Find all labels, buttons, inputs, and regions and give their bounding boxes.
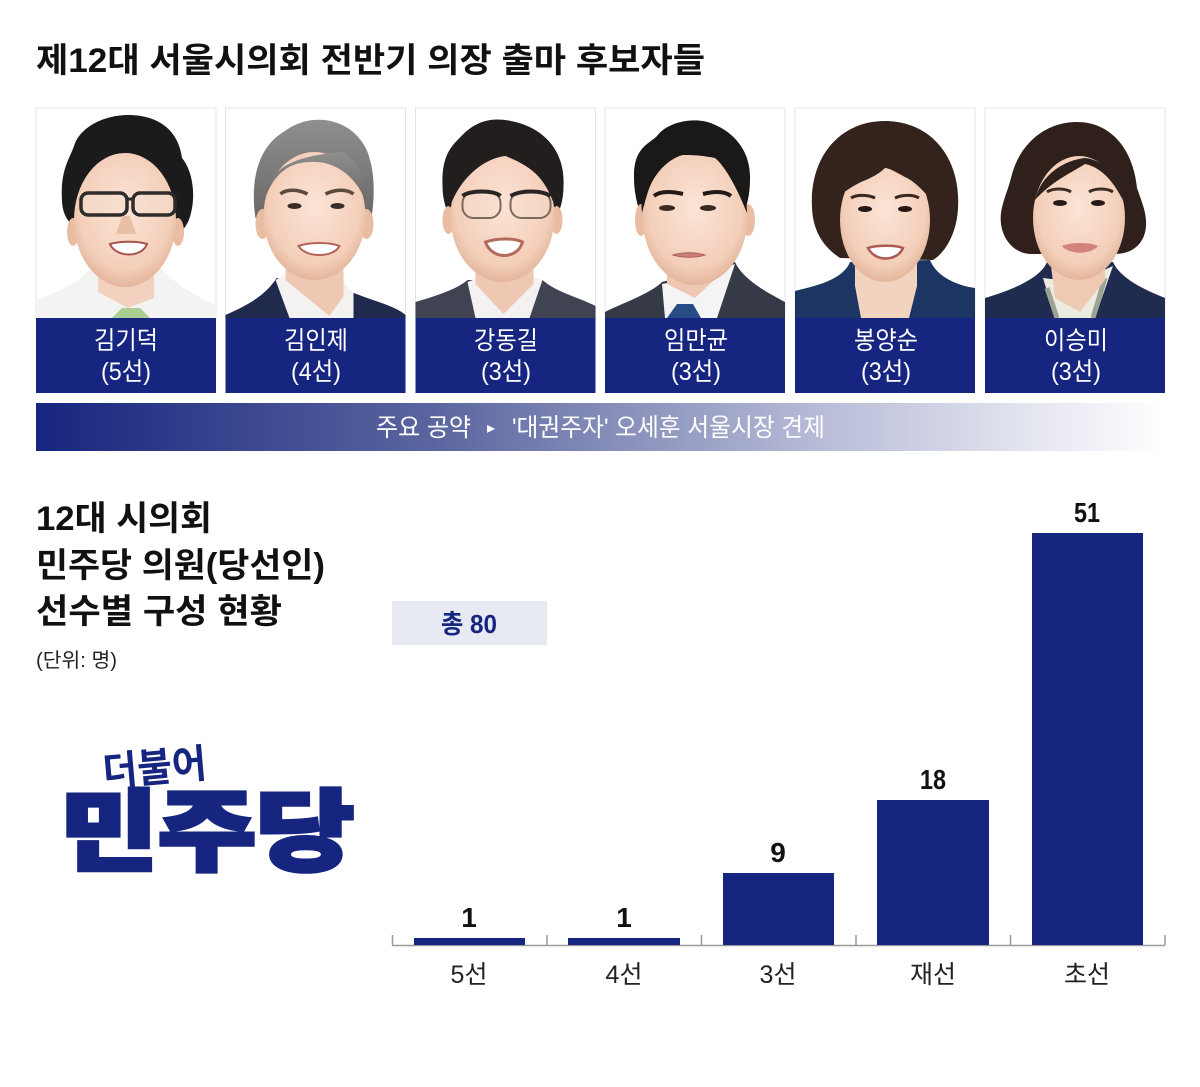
banner: main pledge [36,403,1165,451]
logo: 더불어민주당: 민주당 [60,783,354,882]
candidate card: 강동길: (3선) [481,358,531,386]
candidate card: 김기덕: (5선) [101,358,151,386]
candidate card: 이승미 [985,108,1165,393]
candidate card: 강동길 [416,108,596,393]
bar: 4선: 4선 [606,961,642,989]
bar: 재선: 재선 [910,961,956,989]
candidate card: 이승미: 이승미 [1044,327,1108,355]
portrait: 임만균 [605,120,785,318]
candidate card: 봉양순: 봉양순 [854,327,918,355]
portrait: 김인제 [226,120,406,318]
banner: main pledge: ▸ [487,420,495,437]
candidate card: 임만균 [605,108,785,393]
bar: 5선: 5선 [451,961,487,989]
candidate card: 김기덕: 김기덕 [94,327,158,355]
bar: 4선 [568,902,680,989]
bar: 초선: 초선 [1064,961,1110,989]
banner: main pledge: 주요 공약 [376,414,471,442]
candidate card: 봉양순 [795,108,975,393]
candidate card: 김인제: (4선) [291,358,341,386]
portrait: 봉양순 [795,121,975,318]
chart heading: 12대 시의회 [36,500,212,538]
bar: 5선: 1 [461,902,477,933]
logo: 더불어민주당 [60,742,354,882]
bar: 4선: 1 [616,902,632,933]
logo: 더불어민주당: 더불어 [101,742,208,795]
candidate card: 김인제 [226,108,406,393]
panel: candidates [36,108,1165,393]
bar: 3선 [723,837,834,989]
candidate card: 김기덕 [36,108,216,393]
candidate card: 김인제: 김인제 [284,327,348,355]
bar chart [392,497,1165,989]
portrait: 강동길 [416,119,596,318]
banner: main pledge: '대권주자' 오세훈 서울시장 견제 [512,414,825,442]
portrait: 이승미 [985,122,1165,318]
bar: 3선: 9 [770,837,786,868]
candidate card: 임만균: (3선) [671,358,721,386]
title: 제12대 서울시의회 전반기 의장 출마 후보자들 [36,42,705,80]
chart heading [36,500,325,631]
bar: 3선: 3선 [760,961,796,989]
total callout: 총 80 [441,609,497,639]
candidate card: 강동길: 강동길 [474,327,538,355]
unit note: (단위: 명) [36,649,117,672]
bar: 초선 [1032,497,1143,989]
chart heading: 민주당 의원(당선인) [36,547,325,585]
candidate card: 이승미: (3선) [1051,358,1101,386]
bar: 5선 [414,902,525,989]
candidate card: 봉양순: (3선) [861,358,911,386]
chart heading: 선수별 구성 현황 [36,593,282,631]
portrait: 김기덕 [36,115,216,318]
bar: 재선: 18 [920,764,946,795]
candidate card: 임만균: 임만균 [664,327,728,355]
bar: 초선: 51 [1074,497,1100,528]
bar: 재선 [877,764,989,989]
total callout [392,601,547,645]
